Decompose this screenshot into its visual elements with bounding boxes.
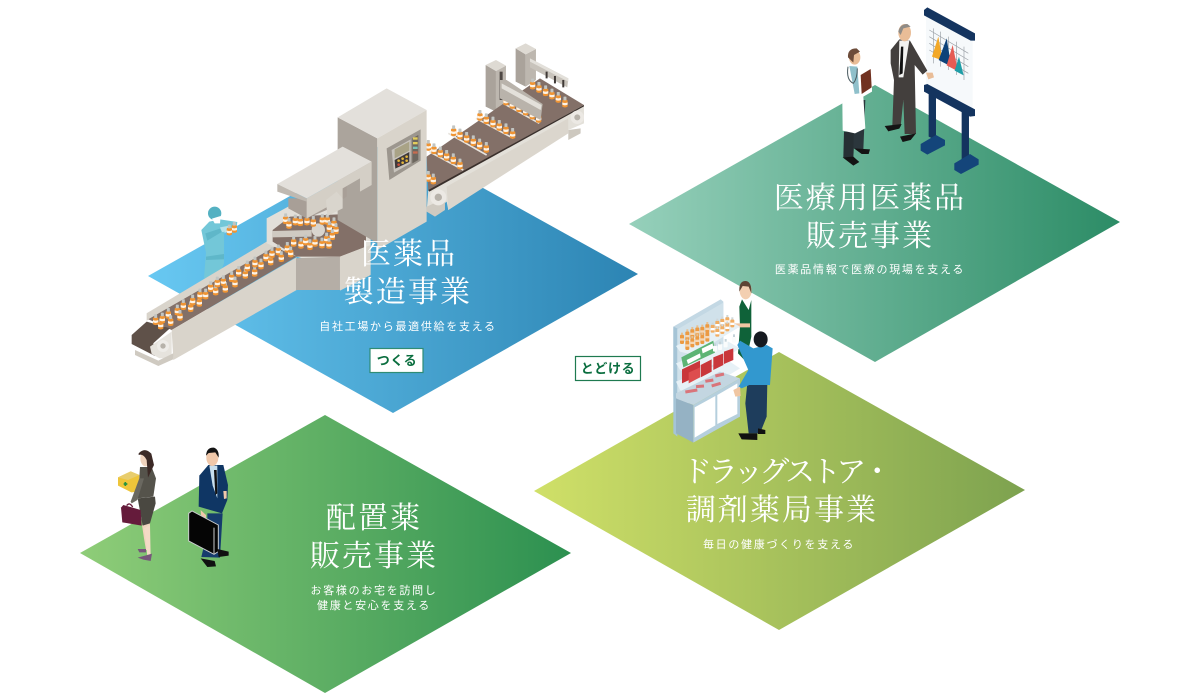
icon: presenter in dark suit — [885, 24, 934, 142]
description: ethical drug sales: 医薬品情報で医療の現場を支える — [775, 262, 965, 276]
illustration: medicine sales representatives — [118, 448, 229, 567]
icon: medicine shelf unit — [673, 299, 740, 443]
heading block: drugstore and pharmacy: ドラッグストア・ — [682, 456, 888, 489]
description: household medicine sales: お客様のお宅を訪問し — [310, 583, 438, 597]
label: make tag — [370, 348, 423, 372]
illustration: drugstore shelf with staff and customer — [673, 281, 773, 443]
icon: woman with first-aid box and bag — [118, 450, 156, 561]
icon: businessman with black briefcase — [189, 448, 229, 567]
heading block: ethical drug sales — [774, 182, 966, 276]
label: deliver tag — [576, 356, 640, 380]
heading block: ethical drug sales: 医療用医薬品 — [774, 182, 966, 215]
inspection machine cabinet with control panel — [338, 88, 427, 250]
upper conveyor uprights — [486, 43, 536, 112]
illustration: factory production line with worker — [132, 43, 584, 366]
icon: factory worker — [201, 207, 237, 278]
icon: customer in blue shirt — [733, 331, 773, 440]
description: household medicine sales: 健康と安心を支える — [317, 598, 431, 612]
heading block: manufacturing: 製造事業 — [344, 275, 472, 309]
heading block: manufacturing: 医薬品 — [361, 238, 457, 271]
heading block: drugstore and pharmacy — [682, 456, 888, 551]
heading block: manufacturing — [319, 238, 497, 333]
shelf products — [680, 315, 736, 392]
machine head arm over table — [277, 147, 372, 218]
description: household medicine sales — [310, 583, 438, 612]
heading block: ethical drug sales: 販売事業 — [806, 220, 934, 253]
label: make tag: つくる — [377, 353, 417, 368]
panel: household medicine sales diamond — [80, 415, 571, 693]
icon: pharmacist in green apron — [734, 281, 755, 363]
label: deliver tag: とどける — [581, 361, 635, 376]
heading block: household medicine sales — [310, 502, 438, 612]
upper conveyor belt — [427, 78, 584, 217]
lower conveyor belt — [132, 242, 297, 366]
icon: doctor in white coat — [842, 48, 872, 166]
description: manufacturing: 自社工場から最適供給を支える — [319, 319, 497, 333]
illustration: doctor and presenter at chart board — [842, 7, 979, 174]
rotary filling table — [267, 203, 371, 291]
icon: presentation board with chart — [921, 7, 979, 174]
heading block: household medicine sales: 販売事業 — [310, 540, 438, 573]
description: drugstore and pharmacy: 毎日の健康づくりを支える — [703, 537, 855, 551]
panel: pharmaceutical manufacturing diamond — [148, 138, 638, 413]
bottles on lower belt and table — [153, 213, 339, 329]
heading block: household medicine sales: 配置薬 — [326, 502, 422, 535]
bottles on upper belt — [426, 79, 568, 184]
heading block: drugstore and pharmacy: 調剤薬局事業 — [686, 494, 878, 527]
upper conveyor guide plate and nozzle bar — [500, 58, 568, 120]
panel: drugstore and dispensing pharmacy diamond — [534, 352, 1025, 630]
panel: ethical drug sales diamond — [629, 85, 1120, 362]
